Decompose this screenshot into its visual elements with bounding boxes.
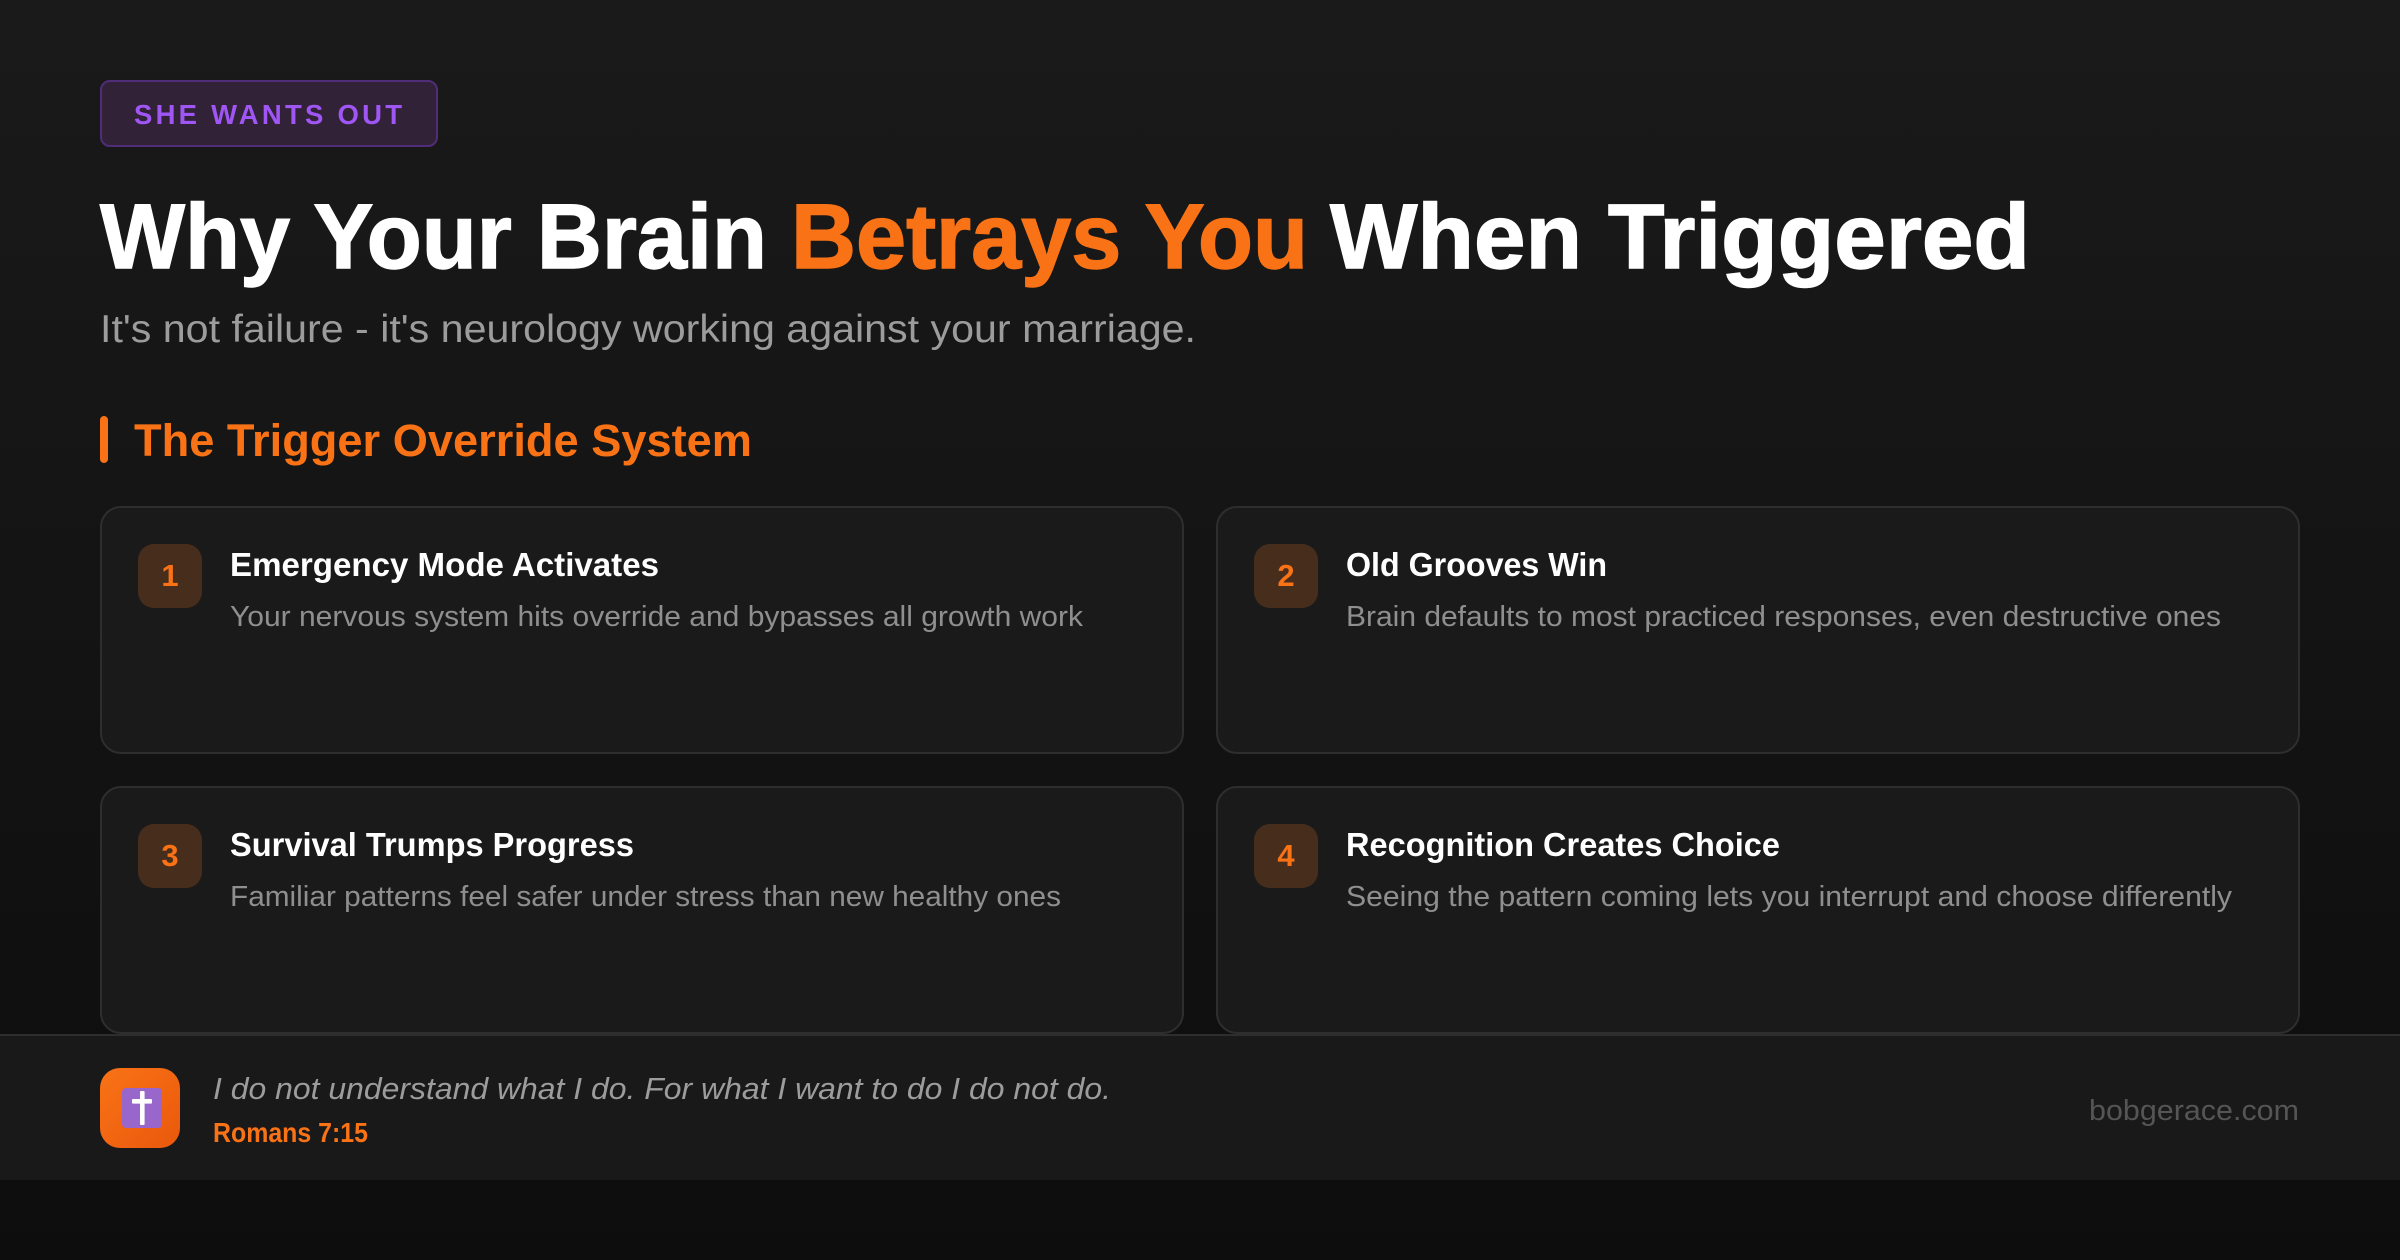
card 3: survival trumps: 3 — [161, 838, 179, 873]
card 1: emergency mode: Your nervous system hits override and bypasses all growth work — [230, 601, 1084, 633]
card 4: recognition: Recognition Creates Choice — [1346, 826, 1780, 863]
card 2: old grooves: Brain defaults to most practiced responses, even destructive ones — [1346, 601, 2221, 633]
badge: she wants out: SHE WANTS OUT — [134, 99, 402, 130]
card 3: survival trumps — [101, 787, 1183, 1033]
title: When Triggered — [1330, 186, 2030, 288]
card 4: recognition: 4 — [1277, 838, 1295, 873]
scripture quote: I do not understand what I do. For what I want to do I do not do. — [213, 1071, 1111, 1106]
website: bobgerace.com — [2089, 1095, 2299, 1127]
card 3: survival trumps: Familiar patterns feel safer under stress than new healthy ones — [230, 881, 1061, 913]
footer bar — [0, 1034, 2400, 1180]
card 1: emergency mode: Emergency Mode Activates — [230, 546, 659, 583]
icon: cross — [100, 1068, 180, 1148]
card 3: survival trumps: Survival Trumps Progress — [230, 826, 634, 863]
scripture reference: Romans 7:15 — [213, 1117, 368, 1148]
card 4: recognition — [1217, 787, 2299, 1033]
card 2: old grooves: Old Grooves Win — [1346, 546, 1607, 583]
card 1: emergency mode — [101, 507, 1183, 753]
title: Betrays You — [791, 186, 1308, 288]
card 1: emergency mode: 1 — [161, 558, 179, 593]
card 2: old grooves: 2 — [1277, 558, 1295, 593]
section heading: The Trigger Override System — [134, 415, 752, 466]
card 4: recognition: Seeing the pattern coming lets you interrupt and choose differently — [1346, 881, 2233, 913]
subtitle: It's not failure - it's neurology working against your marriage. — [100, 308, 1196, 351]
title — [100, 186, 2030, 288]
badge: she wants out — [101, 81, 437, 146]
title: Why Your Brain — [100, 186, 767, 288]
card 2: old grooves — [1217, 507, 2299, 753]
